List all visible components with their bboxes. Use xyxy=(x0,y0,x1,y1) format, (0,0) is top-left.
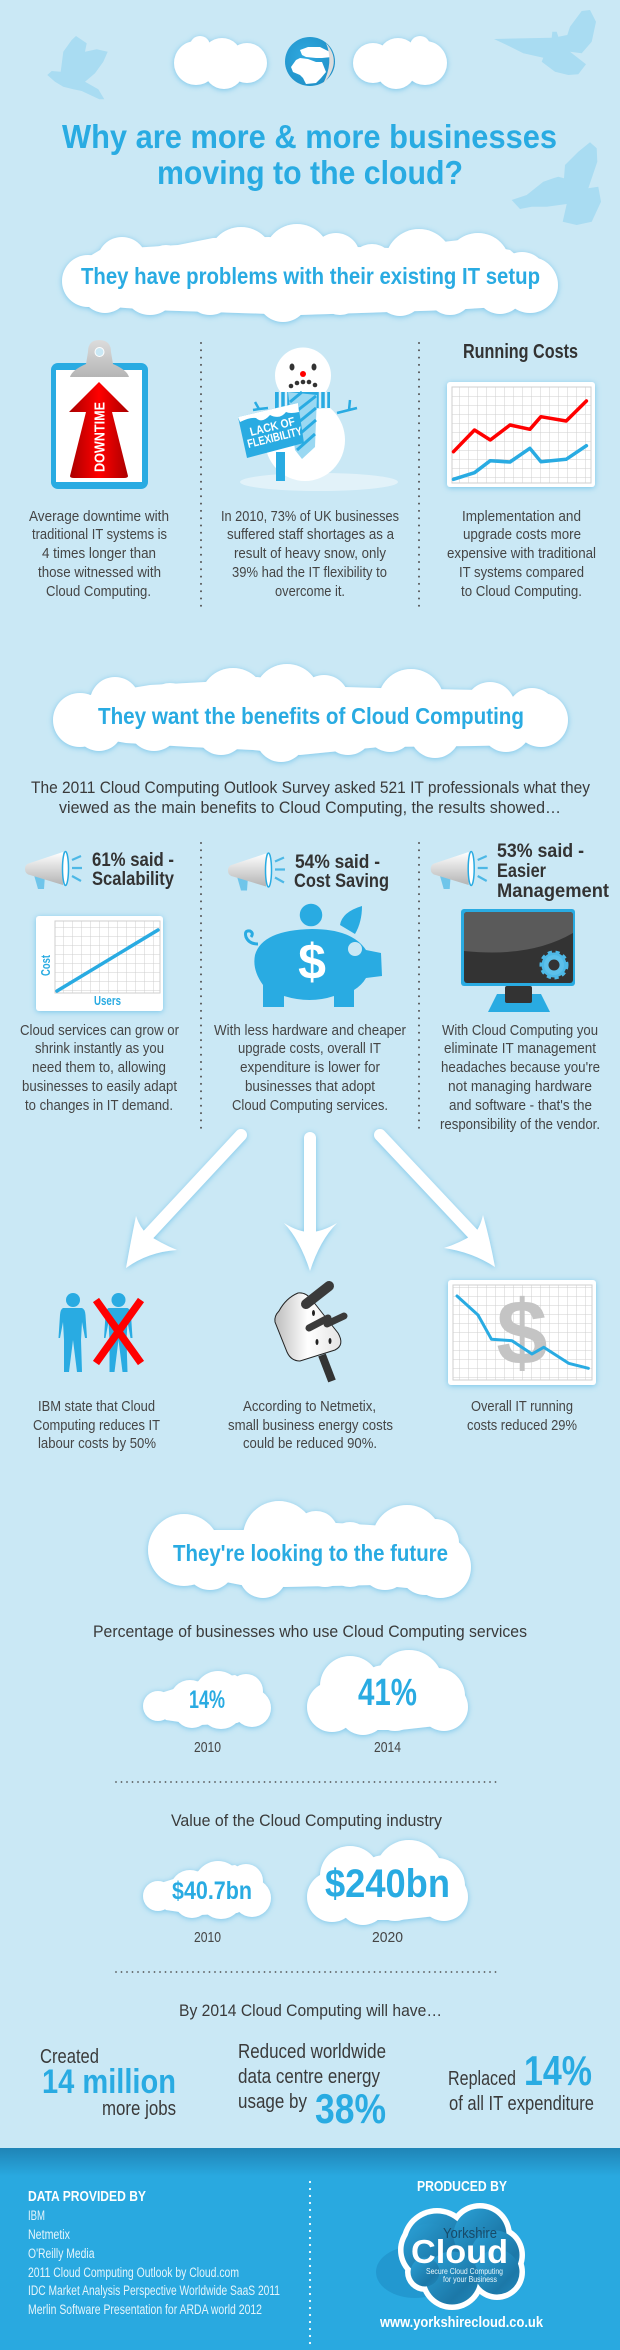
subheading: value of industry: Value of the Cloud Computing industry xyxy=(171,1811,442,1830)
column divider 2 xyxy=(418,343,420,612)
text: easier management description: eliminate IT management xyxy=(444,1040,597,1057)
text: cost saving description: With less hardware and cheaper xyxy=(214,1022,406,1039)
list: data sources: IDC Market Analysis Perspective Worldwide SaaS 2011 xyxy=(28,2283,280,2298)
heading: benefits of cloud computing: They want the benefits of Cloud Computing xyxy=(98,703,524,729)
subheading: percentage of businesses: Percentage of businesses who use Cloud Computing services xyxy=(93,1622,527,1641)
list: data sources: 2011 Cloud Computing Outlook by Cloud.com xyxy=(28,2265,239,2280)
logo: Yorkshire Cloud xyxy=(376,2203,525,2310)
label: 2010: 2010 xyxy=(194,1929,221,1946)
stat cloud: 14% in 2010: 14% xyxy=(189,1686,225,1714)
logo: Yorkshire Cloud: Secure Cloud Computing xyxy=(426,2266,503,2276)
stat cloud: $240bn in 2020: $240bn xyxy=(325,1862,450,1906)
text: IBM labour costs xyxy=(33,1398,160,1452)
text: running costs reduced xyxy=(467,1398,577,1434)
text: downtime: traditional IT systems is xyxy=(32,526,167,543)
text: snow shortages: result of heavy snow, only xyxy=(234,545,386,562)
icon: clipboard with downtime arrow: DOWNTIME xyxy=(92,402,108,472)
text: IBM labour costs: labour costs by 50% xyxy=(38,1435,156,1452)
text: running costs: Implementation and xyxy=(462,508,581,525)
icon: small cloud right xyxy=(353,36,447,89)
heading: cost saving xyxy=(294,852,389,892)
text: scalability description: shrink instantly as you xyxy=(35,1040,164,1057)
text: running costs reduced: costs reduced 29% xyxy=(467,1417,577,1434)
stat: data centre energy 38%: Reduced worldwide xyxy=(238,2041,386,2063)
icon: bird silhouette right xyxy=(512,142,601,225)
text: running costs: to Cloud Computing. xyxy=(461,583,582,600)
text: survey intro: viewed as the main benefits to Cloud Computing, the results showed… xyxy=(59,798,561,817)
text: cost saving description: Cloud Computing services. xyxy=(232,1097,388,1114)
subheading: by 2014: By 2014 Cloud Computing will have… xyxy=(179,2001,442,2020)
list: data sources: Merlin Software Presentation for ARDA world 2012 xyxy=(28,2302,262,2317)
icon: megaphone 1 xyxy=(25,852,82,889)
stat: replaced 14%: of all IT expenditure xyxy=(449,2093,594,2115)
heading: data provided by: DATA PROVIDED BY xyxy=(28,2189,146,2205)
text: survey intro xyxy=(31,778,590,817)
text: cost saving description: upgrade costs, overall IT xyxy=(238,1040,381,1057)
icon: clipboard with downtime arrow xyxy=(51,340,148,489)
stat cloud: 41% in 2014 xyxy=(307,1650,468,1735)
link text: website: www.yorkshirecloud.co.uk xyxy=(379,2314,544,2331)
text: scalability description: to changes in IT demand. xyxy=(25,1097,173,1114)
heading: easier management: 53% said - xyxy=(497,841,584,862)
stat cloud: $40.7bn in 2010: $40.7bn xyxy=(172,1877,252,1905)
stat: 14 million jobs xyxy=(40,2046,176,2120)
arrow: right xyxy=(380,1135,495,1267)
heading: easier management xyxy=(497,841,610,902)
label: 2014: 2014 xyxy=(374,1739,401,1756)
panel: future heading cloud xyxy=(148,1501,471,1598)
list: data sources: O'Reilly Media xyxy=(28,2246,95,2261)
column divider 3 xyxy=(200,843,202,1135)
stat cloud: 14% in 2010 xyxy=(143,1671,271,1729)
icon: people with red cross xyxy=(58,1293,141,1372)
heading: looking to the future: They're looking to the future xyxy=(173,1540,448,1566)
panel: benefits heading cloud xyxy=(53,664,568,762)
stat cloud: $240bn in 2020 xyxy=(307,1840,468,1925)
text: downtime: 4 times longer than xyxy=(42,545,156,562)
icon: piggy bank xyxy=(246,903,382,1007)
heading: scalability: 61% said - xyxy=(92,850,174,871)
icon: bird silhouette left xyxy=(47,36,108,99)
chart: cost vs users xyxy=(36,916,163,1011)
title: moving to the cloud? xyxy=(157,154,463,191)
text: cost saving description xyxy=(214,1022,406,1114)
chart: falling running costs with dollar: $ xyxy=(496,1282,548,1384)
text: running costs reduced: Overall IT running xyxy=(471,1398,573,1415)
stat: 14 million jobs: 14 million xyxy=(42,2063,176,2101)
text: easier management description: With Cloud Computing you xyxy=(442,1022,598,1039)
text: downtime: Cloud Computing. xyxy=(46,583,151,600)
label: 2010: 2010 xyxy=(194,1739,221,1756)
stat: data centre energy 38%: 38% xyxy=(315,2085,386,2132)
text: downtime: Average downtime with xyxy=(29,508,169,525)
panel: problems heading cloud xyxy=(62,224,558,322)
text: running costs: expensive with traditional xyxy=(447,545,596,562)
icon: megaphone 3 xyxy=(431,852,488,889)
stat cloud: $40.7bn in 2010 xyxy=(143,1861,271,1919)
text: IBM labour costs: IBM state that Cloud xyxy=(38,1398,155,1415)
icon: bird silhouette top right xyxy=(494,10,596,75)
text: energy costs xyxy=(228,1398,393,1452)
column divider 1 xyxy=(200,343,202,612)
list: data sources: IBM xyxy=(28,2208,45,2223)
stat: data centre energy 38% xyxy=(238,2041,386,2132)
arrow: middle xyxy=(284,1138,337,1271)
text: cost saving description: businesses that adopt xyxy=(245,1078,376,1095)
chart: cost vs users: Cost xyxy=(38,955,53,976)
text: easier management description: not managing hardware xyxy=(448,1078,592,1095)
heading: easier management: Easier xyxy=(497,861,547,882)
icon: piggy bank: $ xyxy=(298,934,326,990)
text: energy costs: According to Netmetix, xyxy=(243,1398,376,1415)
column divider 4 xyxy=(418,843,420,1135)
text: scalability description: Cloud services can grow or xyxy=(20,1022,179,1039)
text: downtime xyxy=(29,508,169,600)
chart: cost vs users: Users xyxy=(94,993,121,1008)
heading: running costs: Running Costs xyxy=(463,341,578,363)
text: energy costs: could be reduced 90%. xyxy=(243,1435,377,1452)
text: snow shortages: overcome it. xyxy=(275,583,345,600)
arrow: left xyxy=(126,1135,241,1268)
title xyxy=(62,118,557,191)
text: easier management description xyxy=(440,1022,600,1133)
chart: running costs line chart xyxy=(447,382,595,487)
text: scalability description: need them to, allowing xyxy=(32,1059,166,1076)
panel: footer xyxy=(0,2148,620,2350)
icon: small cloud left xyxy=(174,36,267,89)
text: downtime: those witnessed with xyxy=(38,564,161,581)
logo: Yorkshire Cloud: Cloud xyxy=(411,2233,508,2270)
logo: Yorkshire Cloud: for your Business xyxy=(443,2275,497,2284)
stat: replaced 14%: 14% xyxy=(524,2047,592,2094)
text: easier management description: and software - that's the xyxy=(449,1097,592,1114)
icon: electrical plug xyxy=(275,1286,344,1381)
icon: monitor with gear xyxy=(461,909,575,1012)
title: Why are more & more businesses xyxy=(62,118,557,155)
icon: snowman with sign: FLEXIBILITY xyxy=(246,424,304,451)
text: snow shortages: 39% had the IT flexibility to xyxy=(232,564,387,581)
text: snow shortages: In 2010, 73% of UK businesses xyxy=(221,508,399,525)
heading: cost saving: Cost Saving xyxy=(294,871,389,892)
stat cloud: 41% in 2014: 41% xyxy=(358,1672,417,1714)
stat: 14 million jobs: Created xyxy=(40,2046,99,2068)
stat: 14 million jobs: more jobs xyxy=(102,2098,176,2120)
heading: scalability xyxy=(92,850,174,890)
heading: cost saving: 54% said - xyxy=(295,852,380,873)
heading: produced by: PRODUCED BY xyxy=(417,2179,507,2195)
list: data sources xyxy=(28,2208,280,2317)
text: IBM labour costs: Computing reduces IT xyxy=(33,1417,160,1434)
stat: replaced 14%: Replaced xyxy=(448,2068,516,2090)
text: easier management description: responsibility of the vendor. xyxy=(440,1116,600,1133)
icon: snowman with sign xyxy=(238,348,398,491)
text: snow shortages xyxy=(221,508,399,600)
heading: easier management: Management xyxy=(497,881,610,902)
stat: data centre energy 38%: usage by xyxy=(238,2091,307,2113)
heading: existing IT setup: They have problems with their existing IT setup xyxy=(81,263,540,289)
icon: globe xyxy=(285,37,335,86)
text: running costs: IT systems compared xyxy=(459,564,584,581)
list: data sources: Netmetix xyxy=(28,2227,70,2242)
icon: megaphone 2 xyxy=(228,853,285,890)
logo: Yorkshire Cloud: Yorkshire xyxy=(443,2225,497,2242)
label: 2020: 2020 xyxy=(372,1929,403,1946)
text: cost saving description: expenditure is lower for xyxy=(240,1059,380,1076)
text: scalability description xyxy=(20,1022,179,1114)
text: energy costs: small business energy costs xyxy=(228,1417,393,1434)
chart: falling running costs with dollar xyxy=(448,1280,596,1385)
heading: scalability: Scalability xyxy=(92,869,174,890)
text: snow shortages: suffered staff shortages as a xyxy=(227,526,395,543)
stat: replaced 14% xyxy=(448,2047,594,2115)
text: running costs xyxy=(447,508,596,600)
text: easier management description: headaches because you're xyxy=(441,1059,600,1076)
icon: snowman with sign: LACK OF xyxy=(248,414,296,439)
text: running costs: upgrade costs more xyxy=(463,526,581,543)
stat: data centre energy 38%: data centre energy xyxy=(238,2066,380,2088)
text: scalability description: businesses to easily adapt xyxy=(22,1078,178,1095)
